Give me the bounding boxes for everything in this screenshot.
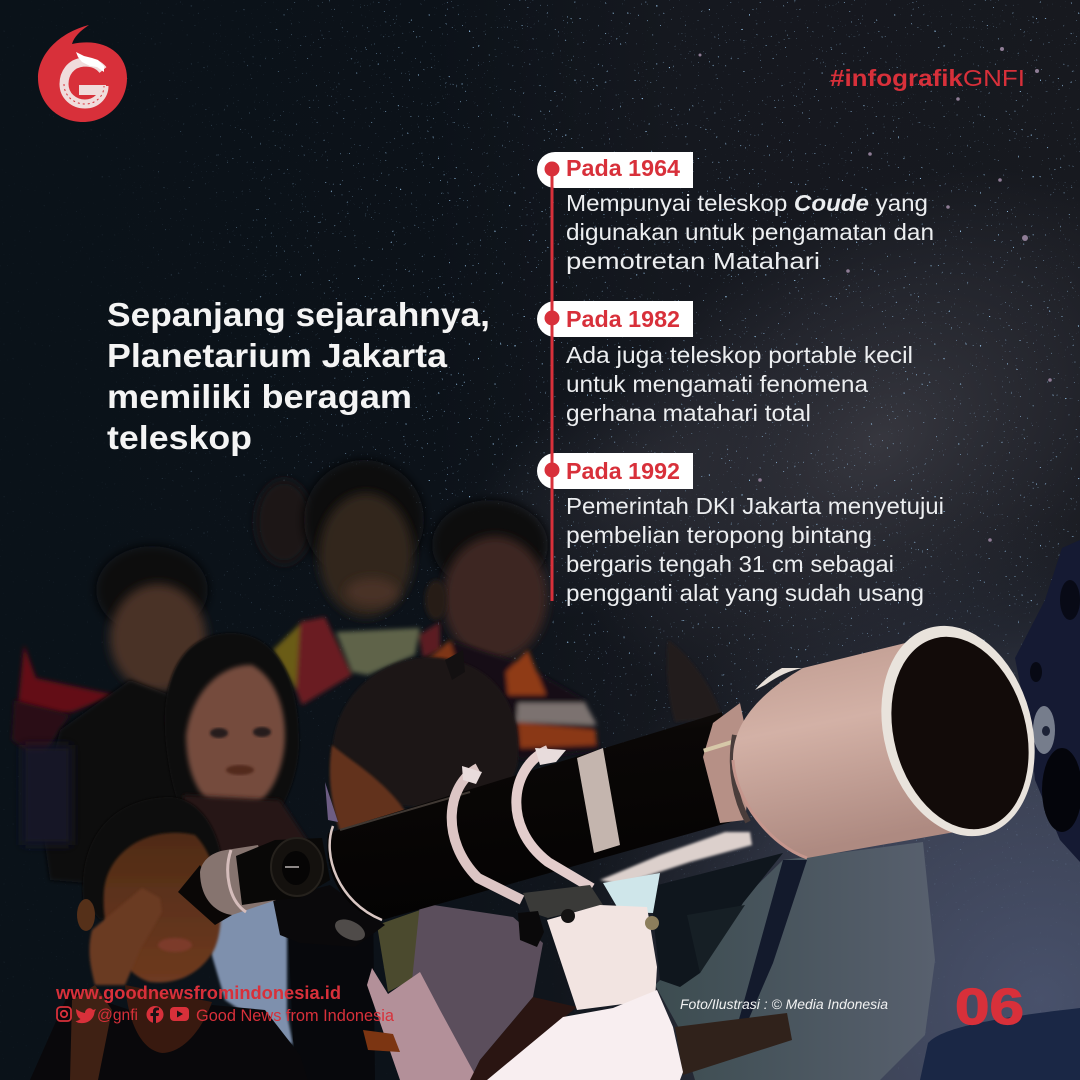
text: 1982: Ada juga teleskop portable kecil xyxy=(566,342,913,368)
ear xyxy=(77,899,95,931)
mount brass screw xyxy=(645,916,659,930)
heading: teleskop xyxy=(107,419,252,456)
knobs below focuser xyxy=(273,885,385,947)
timeline line xyxy=(550,168,554,601)
website url: www.goodnewsfromindonesia.id xyxy=(55,982,341,1003)
person: boy on the right xyxy=(425,500,600,760)
black shirt xyxy=(30,990,308,1080)
person: woman in the centre xyxy=(273,460,440,705)
person: boy on the left xyxy=(22,546,208,890)
text: 1982 xyxy=(566,342,913,426)
tag: Pada 1982 xyxy=(537,301,693,337)
heading xyxy=(107,296,490,456)
text: 1992: Pemerintah DKI Jakarta menyetujui xyxy=(566,493,944,519)
label on tube xyxy=(577,748,620,853)
hashtag: infografikGNFI: #infografik GNFI xyxy=(830,65,1025,91)
person: faint background girl xyxy=(256,480,312,564)
heading: Sepanjang sejarahnya, xyxy=(107,296,490,333)
mount bracket xyxy=(523,885,603,918)
decoration: dark dome at bottom right xyxy=(920,1008,1080,1080)
reflection under tube xyxy=(600,832,752,885)
text: 1992: pengganti alat yang sudah usang xyxy=(566,580,924,606)
arm xyxy=(377,910,420,992)
logo badge xyxy=(38,25,127,122)
tag: Pada 1982: Pada 1982 xyxy=(566,306,680,332)
footer: website and social xyxy=(55,982,395,1025)
logo: GNFI xyxy=(38,25,127,122)
timeline dots xyxy=(544,162,560,478)
mouth xyxy=(158,938,192,952)
hair xyxy=(83,797,222,920)
ring 1 xyxy=(452,768,522,900)
hand over eye xyxy=(89,888,162,985)
page number: 06 xyxy=(955,978,1024,1035)
heading: memiliki beragam xyxy=(107,378,412,415)
heading: Planetarium Jakarta xyxy=(107,337,448,374)
text: 1992 xyxy=(566,493,944,606)
photo: man at right xyxy=(650,640,935,1080)
text: 1964: digunakan untuk pengamatan dan xyxy=(566,219,934,245)
channel name: Good News from Indonesia xyxy=(196,1006,395,1025)
black optical tube xyxy=(327,712,745,920)
timeline xyxy=(537,152,944,606)
logo G emblem xyxy=(64,52,106,104)
mount hole xyxy=(561,909,575,923)
shadow of eyepiece xyxy=(178,865,232,925)
photo credit: Foto/Ilustrasi : © Media Indonesia xyxy=(680,997,889,1012)
person: girl with fringe xyxy=(165,633,310,880)
text: 1992: pembelian teropong bintang xyxy=(566,522,872,548)
dew shield xyxy=(733,638,955,858)
tag: Pada 1964 xyxy=(537,152,693,188)
text: 1992: bergaris tengah 31 cm sebagai xyxy=(566,551,894,577)
person: dotted shirt behind child xyxy=(200,880,293,1045)
text: 1964 xyxy=(566,190,934,274)
person: child covering one eye xyxy=(30,797,308,1080)
focuser collar xyxy=(200,845,276,915)
eyepiece xyxy=(236,838,330,905)
shirt xyxy=(655,842,935,1080)
bright stars xyxy=(698,47,1052,542)
tag: Pada 1964: Pada 1964 xyxy=(566,155,680,181)
person: dark body beside child xyxy=(287,895,375,1080)
face xyxy=(104,833,221,983)
object: cloth dark continuation xyxy=(12,700,70,760)
text: 1964: pemotretan Matahari xyxy=(566,248,820,274)
icon: twitter xyxy=(76,1008,96,1023)
text: 1982: gerhana matahari total xyxy=(566,400,811,426)
neck xyxy=(125,985,212,1053)
collar xyxy=(703,703,752,823)
tag: Pada 1992: Pada 1992 xyxy=(566,458,680,484)
sleeve xyxy=(367,968,478,1080)
face in background xyxy=(667,640,722,722)
arm xyxy=(70,985,112,1080)
mount upper cylinder xyxy=(547,905,657,1010)
decoration: planetarium projector sphere xyxy=(1015,540,1080,862)
sweater body xyxy=(410,903,543,1080)
dark chest xyxy=(650,853,783,987)
telescope xyxy=(200,608,1057,1080)
mount elbow xyxy=(487,990,683,1080)
mount knob xyxy=(518,911,544,947)
icon: facebook xyxy=(146,1006,164,1023)
object: red cloth at left xyxy=(18,645,115,713)
photo: crowd of children in the dark xyxy=(12,460,600,1080)
handle: @gnfi xyxy=(97,1007,138,1024)
tag: Pada 1992 xyxy=(537,453,693,489)
person: girl looking through the telescope xyxy=(325,650,577,1080)
strap xyxy=(738,860,807,1023)
orange detail below boy xyxy=(363,1030,400,1052)
ring 2 xyxy=(516,750,592,888)
neck and chest xyxy=(183,795,310,880)
under mount shadow xyxy=(470,997,577,1080)
icon: instagram xyxy=(57,1007,71,1021)
mount light-blue block xyxy=(603,873,660,913)
text: 1982: untuk mengamati fenomena xyxy=(566,371,869,397)
icon: youtube xyxy=(170,1007,189,1021)
text: 1964: Mempunyai teleskop Coude yang xyxy=(566,190,928,216)
arm xyxy=(675,1013,792,1075)
mouth of dew shield xyxy=(859,608,1057,854)
